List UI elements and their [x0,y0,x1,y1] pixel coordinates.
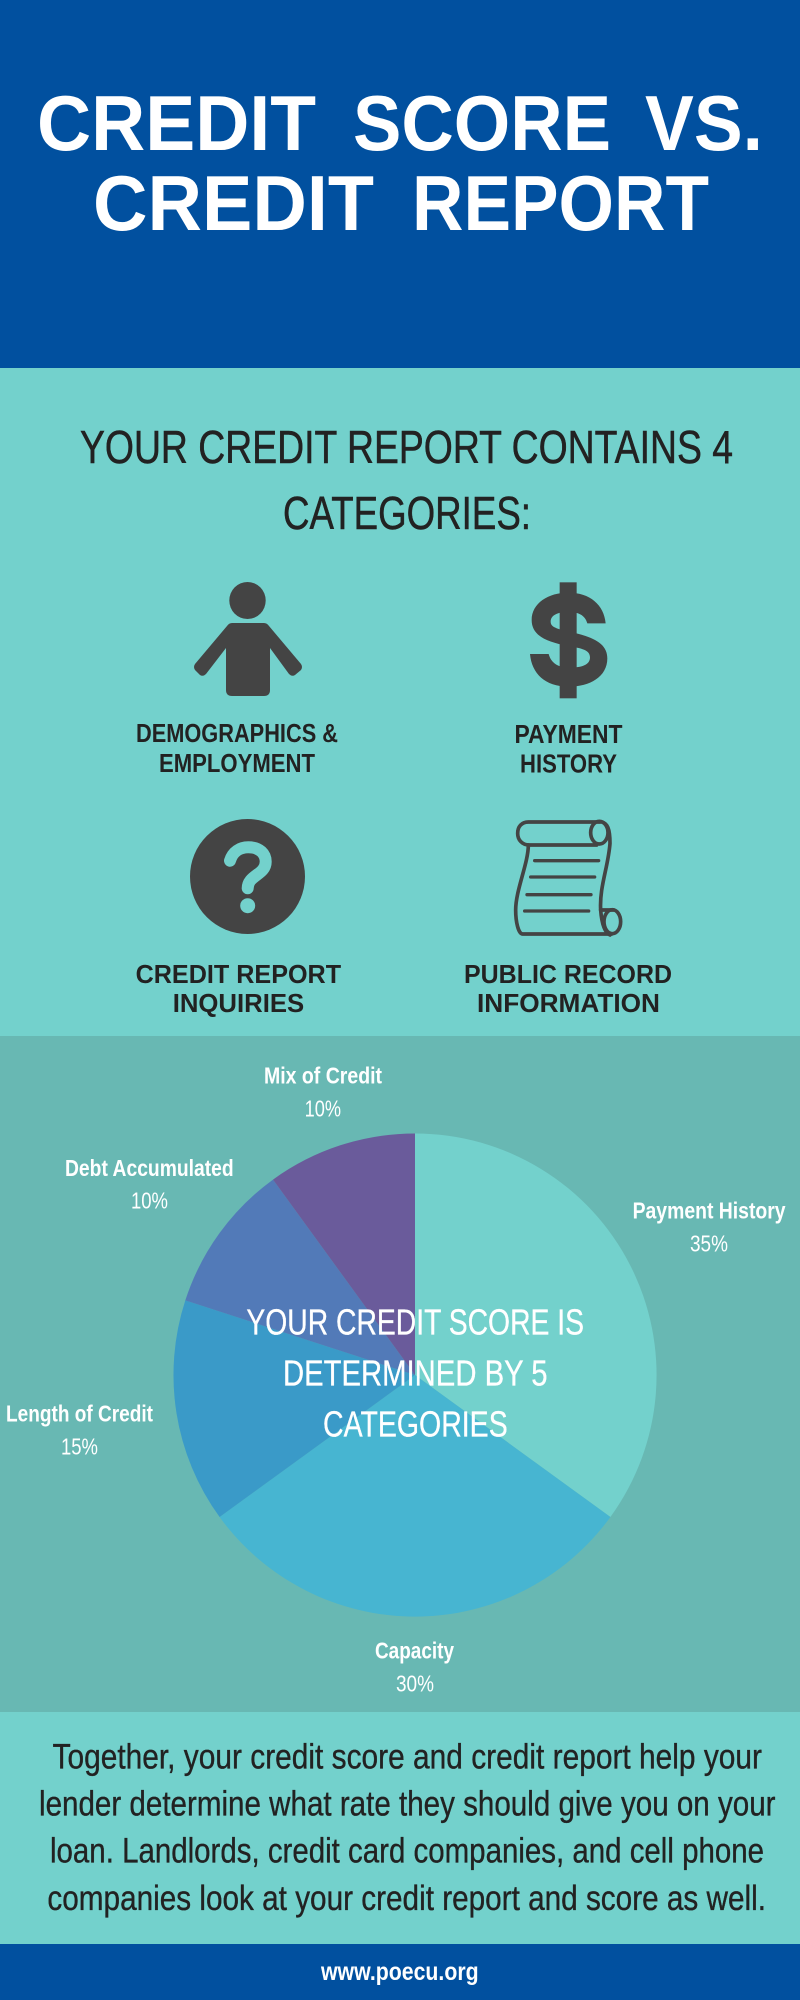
label: credit report inquiries [136,959,341,1018]
panel: footer [0,1944,800,2000]
label: debt accumulated 10%: 10% [131,1188,168,1214]
text block: lender explanation [39,1737,776,1918]
label: credit report inquiries: CREDIT REPORT [136,959,341,989]
label: debt accumulated 10%: Debt Accumulated [65,1155,234,1181]
label: length of credit 15%: 15% [61,1434,98,1460]
panel: credit score pie chart [0,1036,800,1712]
label: public record information: PUBLIC RECORD [464,959,672,989]
label: mix of credit 10%: Mix of Credit [264,1063,382,1089]
icon: dollar sign [530,582,607,698]
label: capacity 30%: 30% [396,1670,434,1696]
label: demographics and employment: DEMOGRAPHICS & [136,718,338,748]
label: capacity 30% [375,1638,454,1696]
icon: scroll [516,821,621,935]
label: capacity 30%: Capacity [375,1638,454,1664]
panel: credit report categories [0,368,800,1036]
label: payment history 35% [633,1197,786,1256]
label: payment history [514,719,623,778]
label: public record information [464,959,672,1018]
panel: header [0,0,800,368]
label: debt accumulated 10% [65,1155,234,1214]
footer url: www.poecu.org [320,1958,479,1986]
heading: credit score determined by 5 categories [246,1302,584,1445]
label: demographics and employment [136,718,338,778]
title [37,79,763,247]
icon: person [194,582,302,696]
panel: closing text [0,1712,800,1944]
label: length of credit 15%: Length of Credit [6,1401,153,1427]
label: mix of credit 10%: 10% [305,1096,341,1122]
heading: credit report contains 4 categories: CATEGORIES: [283,487,531,539]
heading: credit score determined by 5 categories: DETERMINED BY 5 [283,1353,548,1394]
title: VS. [645,79,763,167]
heading: credit report contains 4 categories [80,421,733,539]
icon: question mark [190,819,305,934]
title: REPORT [412,159,709,247]
label: payment history: PAYMENT [514,719,623,749]
label: credit report inquiries: INQUIRIES [173,988,304,1018]
label: payment history: HISTORY [520,748,617,778]
heading: credit score determined by 5 categories: YOUR CREDIT SCORE IS [246,1302,584,1343]
label: public record information: INFORMATION [477,988,660,1018]
label: payment history 35%: 35% [690,1230,728,1256]
title: CREDIT [37,79,316,167]
title: CREDIT [93,159,374,247]
pie chart [173,1133,657,1617]
title: SCORE [353,79,611,167]
label: demographics and employment: EMPLOYMENT [159,748,315,778]
label: mix of credit 10% [264,1063,382,1122]
heading: credit score determined by 5 categories: CATEGORIES [323,1404,508,1445]
label: length of credit 15% [6,1401,153,1460]
